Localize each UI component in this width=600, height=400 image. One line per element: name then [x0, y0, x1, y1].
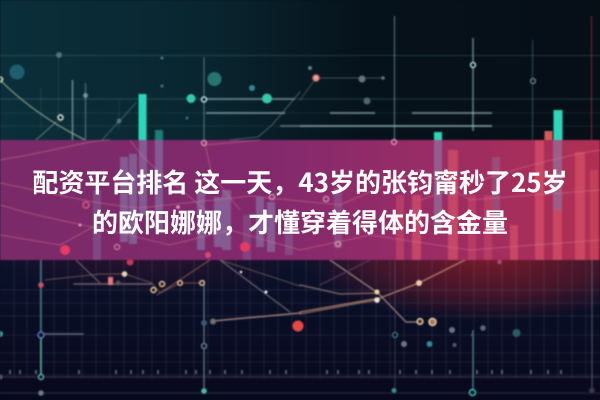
band bars: red — [396, 140, 598, 260]
lower markers — [0, 258, 595, 396]
top vertical guide lines — [41, 16, 592, 140]
text: 配资平台排名 这一天，43岁的张钧甯秒了25岁 — [32, 163, 568, 200]
lower vertical lines — [41, 260, 592, 393]
dots on top area — [0, 52, 536, 124]
top trend lines — [0, 78, 316, 140]
band bars: blue-grey — [93, 140, 562, 260]
panel: title band — [0, 140, 600, 260]
grid lines — [0, 260, 600, 378]
band markers — [60, 140, 396, 258]
text: 的欧阳娜娜，才懂穿着得体的含金量 — [92, 203, 508, 240]
top horizontal guide lines — [0, 56, 600, 126]
title — [32, 163, 568, 240]
teal bars — [138, 94, 562, 140]
band chart lines — [0, 140, 600, 250]
tick labels row — [9, 370, 562, 374]
small red bar — [544, 131, 552, 140]
lower chart lines and markers — [0, 260, 600, 393]
